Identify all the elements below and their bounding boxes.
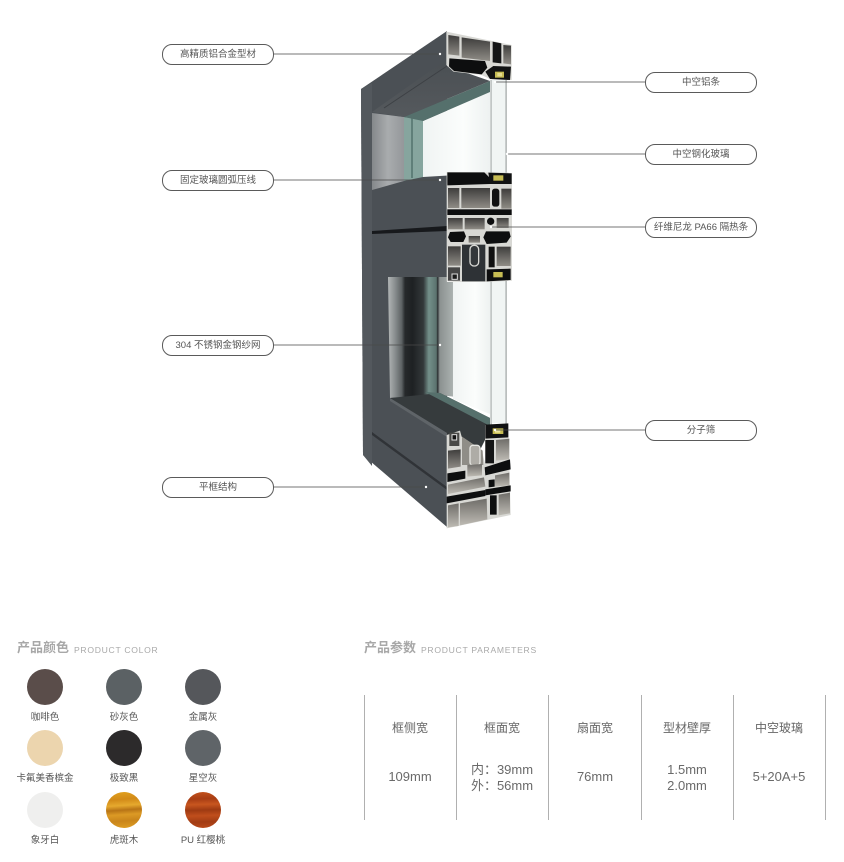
panel: colour swatches: 卡氟美香槟金 (16, 773, 74, 784)
label: tempered glass (645, 144, 757, 165)
label: glazing bead (162, 170, 274, 191)
heading: product parameters: PRODUCT PARAMETERS (421, 645, 537, 655)
label: spacer bar (645, 72, 757, 93)
label: stainless mesh (162, 335, 274, 356)
table: product parameters: 框面宽 (484, 721, 520, 735)
upper glass pane (423, 92, 490, 177)
panel: colour swatches: 虎斑木 (110, 835, 138, 846)
table: product parameters: 扇面宽 (577, 721, 613, 735)
panel: colour swatches: 砂灰色 (110, 712, 138, 723)
label: aluminium profile: 高精质铝合金型材 (180, 49, 256, 60)
frame front face (361, 31, 447, 527)
panel: colour swatches: 金属灰 (189, 712, 217, 723)
panel: colour swatches: 极致黑 (110, 773, 138, 784)
middle profile section (447, 172, 512, 282)
label: thermal break (645, 217, 757, 238)
window body (361, 31, 507, 527)
label: flat frame (162, 477, 274, 498)
upper opening reveal (372, 113, 404, 190)
lower opening (388, 277, 456, 398)
panel: colour swatches: 咖啡色 (31, 712, 59, 723)
table: product parameters: 中空玻璃 (755, 721, 803, 735)
table: product parameters: 5+20A+5 (753, 769, 805, 784)
table: product parameters: 框侧宽 (392, 721, 428, 735)
heading: product color: 产品颜色 (17, 640, 69, 655)
upper soffit (372, 59, 490, 117)
label: stainless mesh: 304 不锈钢金钢纱网 (176, 340, 260, 351)
panel: colour swatches: 星空灰 (189, 773, 217, 784)
leader lines and dots (272, 53, 645, 488)
label: thermal break: 纤维尼龙 PA66 隔热条 (654, 222, 748, 233)
label: molecular sieve (645, 420, 757, 441)
heading: product color: PRODUCT COLOR (74, 645, 158, 655)
top profile section (446, 32, 512, 80)
table: product parameters: 109mm (388, 769, 432, 784)
table: product parameters: 内：39mm (471, 762, 533, 777)
table: product parameters: 2.0mm (667, 778, 707, 792)
label: flat frame: 平框结构 (199, 482, 237, 493)
panel: colour swatches: PU 红樱桃 (181, 835, 225, 846)
bottom frame groove (372, 432, 447, 490)
heading: product parameters (364, 640, 537, 655)
panel: colour swatches (16, 669, 225, 846)
panel: colour swatches: 象牙白 (31, 835, 59, 846)
label: glazing bead: 固定玻璃圆弧压线 (180, 175, 256, 186)
lower sill slope (390, 393, 490, 470)
double glazing edges (490, 80, 492, 425)
label: aluminium profile (162, 44, 274, 65)
middle rail groove (372, 226, 447, 234)
heading: product parameters: 产品参数 (364, 640, 416, 655)
heading: product color (17, 640, 158, 655)
bottom profile section (447, 423, 511, 528)
table: product parameters: 76mm (577, 769, 613, 784)
table: product parameters: 1.5mm (667, 762, 707, 777)
label: molecular sieve: 分子筛 (687, 425, 715, 436)
table: product parameters: 外：56mm (471, 778, 533, 792)
label: tempered glass: 中空钢化玻璃 (672, 149, 730, 160)
table: product parameters: 型材壁厚 (663, 721, 711, 735)
label: spacer bar: 中空铝条 (682, 77, 720, 88)
